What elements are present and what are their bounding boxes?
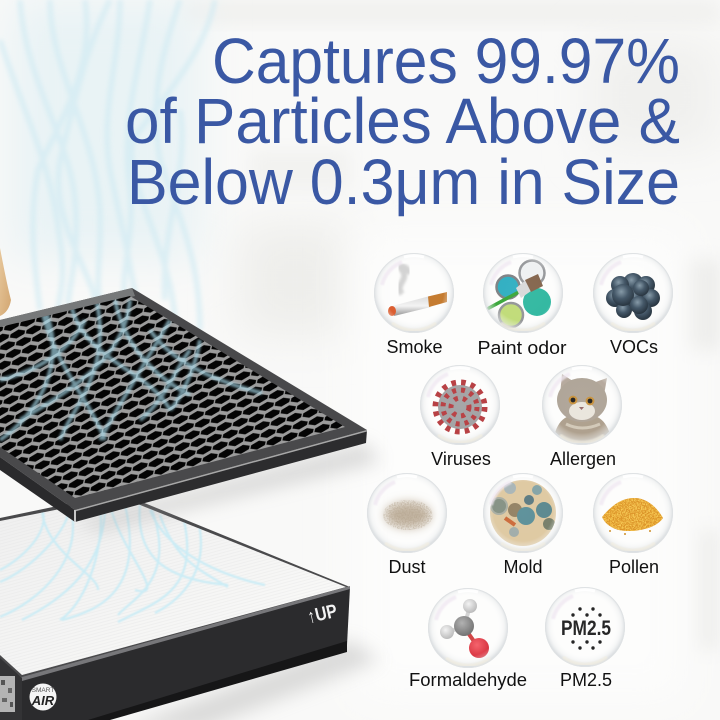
item: Paint odor bbox=[478, 253, 566, 358]
item: Formaldehyde bbox=[409, 588, 527, 690]
foam gasket bbox=[88, 641, 347, 720]
item: VOCs bbox=[593, 253, 673, 357]
title bbox=[125, 25, 680, 218]
icon: VOC cluster bbox=[606, 273, 660, 320]
icon: paint cans and brush bbox=[489, 260, 551, 327]
label: UP: ↑UP bbox=[305, 601, 340, 628]
icon: pollen pile bbox=[602, 498, 663, 535]
frame top bbox=[0, 493, 350, 678]
title: Captures 99.97% bbox=[212, 25, 680, 97]
item: Pollen bbox=[593, 473, 673, 577]
item: Allergen bbox=[542, 365, 622, 469]
QR label bbox=[0, 676, 15, 712]
item: Allergen: Allergen bbox=[550, 449, 616, 469]
item: Smoke: Smoke bbox=[386, 337, 443, 357]
icon: PM2.5 badge: PM2.5 bbox=[561, 617, 611, 640]
icon: cat bbox=[556, 374, 609, 443]
title: Below 0.3μm in Size bbox=[127, 146, 680, 218]
logo: Smart Air bbox=[30, 684, 56, 710]
wooden object at left edge bbox=[0, 248, 11, 316]
air flow streams above filter bbox=[0, 0, 215, 330]
item: Viruses bbox=[420, 365, 500, 469]
icon: formaldehyde molecule bbox=[440, 599, 489, 658]
icon: virus bbox=[436, 383, 484, 431]
air curves over HEPA filter bbox=[0, 505, 265, 622]
HEPA filter (lower) bbox=[0, 493, 350, 720]
item: Mold: Mold bbox=[503, 557, 543, 577]
item: PM2.5 bbox=[545, 587, 625, 690]
item: Pollen: Pollen bbox=[609, 557, 659, 577]
frame top bbox=[0, 288, 367, 510]
item: Smoke bbox=[374, 253, 454, 357]
item: Paint odor: Paint odor bbox=[478, 338, 566, 358]
item: PM2.5: PM2.5 bbox=[560, 670, 612, 690]
pleated HEPA media bbox=[0, 497, 346, 675]
item: Dust: Dust bbox=[388, 557, 426, 577]
shadow under carbon filter bbox=[75, 443, 380, 530]
icon: mold culture bbox=[490, 480, 556, 546]
shadow of HEPA filter bbox=[120, 640, 380, 720]
item: Mold bbox=[483, 473, 563, 577]
item: Dust bbox=[367, 473, 447, 577]
title: of Particles Above & bbox=[125, 85, 680, 157]
front-left side bbox=[0, 457, 75, 522]
icon: cigarette bbox=[388, 267, 447, 316]
item: Viruses: Viruses bbox=[431, 449, 491, 469]
honeycomb mesh bbox=[0, 296, 345, 498]
logo: Smart Air: SMART bbox=[32, 687, 54, 694]
front-right side bbox=[75, 430, 367, 522]
icon: dust pile bbox=[383, 500, 433, 530]
logo: Smart Air: AIR bbox=[31, 693, 55, 708]
air curves through carbon filter bbox=[0, 295, 262, 440]
item: VOCs: VOCs bbox=[610, 337, 658, 357]
left side panel bbox=[0, 658, 22, 720]
item: Formaldehyde: Formaldehyde bbox=[409, 670, 527, 690]
front side panel bbox=[22, 587, 350, 720]
activated carbon honeycomb filter (upper) bbox=[0, 288, 367, 522]
